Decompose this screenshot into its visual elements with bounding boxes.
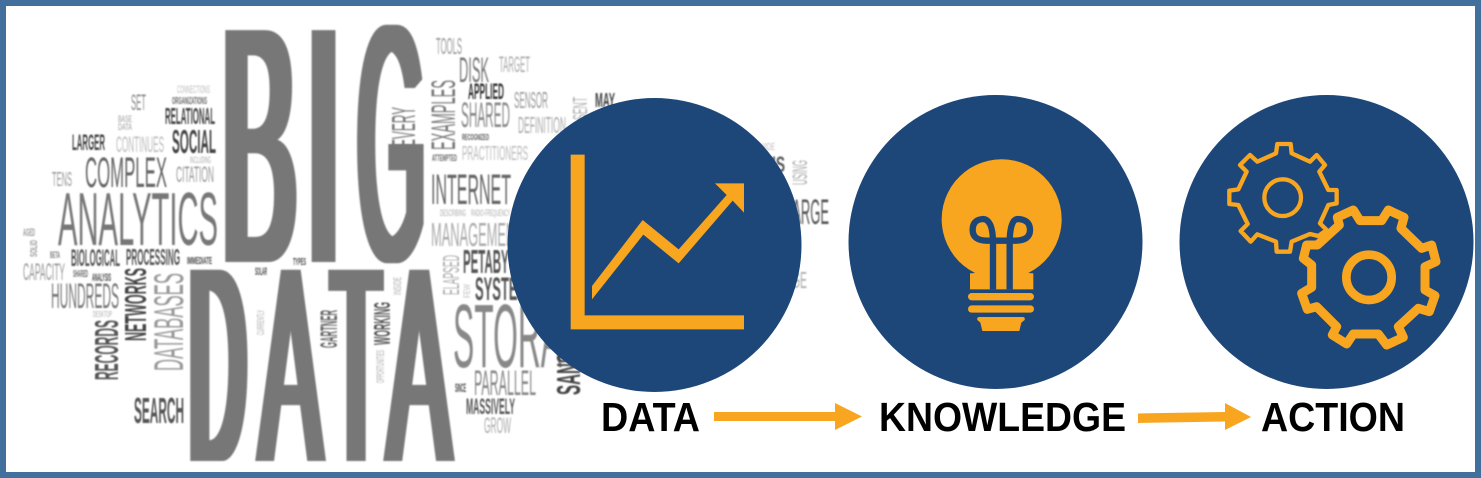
word cloud: CAPACITY [23,259,65,286]
word cloud: HUNDREDS [51,277,119,316]
word cloud: ORGANIZATIONS [172,96,207,107]
big word BIG [222,0,425,335]
word cloud: ANALYSIS [92,272,111,284]
label: DATA: DATA [601,394,700,440]
infographic canvas: LARGE [785,193,829,232]
word cloud: CURRENTLY [256,310,267,335]
word cloud: MANAGEMENT [431,216,523,253]
word cloud: INSIDE [392,277,404,295]
word cloud: EVERY [385,107,422,147]
arrow: knowledge to action [1138,403,1251,430]
word cloud: IMMEDIATE [187,256,212,267]
word cloud: AGE [785,267,807,293]
word cloud: CONTINUES [116,132,164,157]
word cloud: TOOLS [436,33,462,59]
word cloud: MAY [595,90,615,112]
word cloud: TARGET [499,52,530,77]
word cloud: AGED [23,227,35,239]
word cloud: DATABASES [145,273,192,371]
word cloud: GARTNER [316,310,343,348]
word cloud: COMPLEX [85,149,167,197]
word cloud: RECOGNIZED [462,133,489,142]
label: ACTION: ACTION [1261,394,1405,440]
word cloud: MASSIVELY [466,394,515,419]
word cloud: RECORDS [88,320,125,380]
word cloud: SEARCH [134,390,184,431]
panel: action circle [1180,95,1474,389]
word cloud: BIOLOGICAL [71,245,120,272]
word cloud: PARALLEL [474,364,536,403]
word cloud: TENS [52,169,72,191]
panel: knowledge circle [848,95,1142,389]
word cloud: USING [789,160,812,185]
word cloud: WORKING [369,302,395,345]
word cloud: NETWORKS [118,268,153,341]
word cloud: SENSOR [514,87,548,113]
word cloud: GROW [484,413,511,438]
word cloud: DEFINITION [518,112,566,138]
word cloud: RELATIONAL [165,103,215,129]
word cloud: ANALYTICS [58,177,218,261]
word cloud [23,33,829,438]
word cloud: WIDE [760,142,775,153]
word cloud: SOCIAL [172,123,216,160]
word cloud: FEW [462,284,472,298]
word cloud: OPPORTUNITIES [375,350,387,383]
word cloud: APPLIED [468,79,504,104]
word cloud: CONNECTIONS [177,84,210,96]
word cloud: SYSTEMS [475,271,537,307]
word cloud: BASE [118,114,132,124]
word cloud: CITATION [176,162,214,187]
word cloud: SANS [550,353,587,395]
panel: data circle [508,98,802,392]
word cloud: LARGER [72,130,105,155]
word cloud: RADIO-FREQUENCY [471,208,510,218]
word cloud: BETA [50,250,60,260]
word cloud: SOLAR [255,266,267,278]
word cloud: DESCRIBING [440,208,466,218]
word cloud: SHARED [73,269,88,280]
label: KNOWLEDGE: KNOWLEDGE [879,394,1126,440]
word cloud: PRACTITIONERS [462,143,528,165]
word cloud: STORAGE [453,287,608,387]
word cloud: INCLUDING [190,155,211,165]
word cloud: PROCESSING [126,244,180,270]
word cloud: DESKTOP [93,310,112,319]
icon: light bulb [942,159,1062,331]
big word DATA [190,209,450,478]
word cloud: SHARED [461,96,510,135]
word cloud: ATTEMPTED [432,153,457,163]
word cloud: SET [131,90,146,115]
word cloud: ELAPSED [438,255,464,295]
icon: line chart with rising arrow [571,155,744,329]
word cloud: TYPES [293,257,306,268]
word cloud: IS [772,152,785,177]
word cloud: DISK [459,51,489,90]
word cloud: SOLID [29,240,40,257]
icon: two gears [1229,144,1436,345]
word cloud: DATA [118,122,132,132]
word cloud: SENT [570,97,592,120]
word cloud: INTERNET [431,166,511,214]
word cloud: SINCE [455,381,466,395]
arrow: data to knowledge [714,403,862,430]
word cloud: PETABYTES [463,243,531,280]
